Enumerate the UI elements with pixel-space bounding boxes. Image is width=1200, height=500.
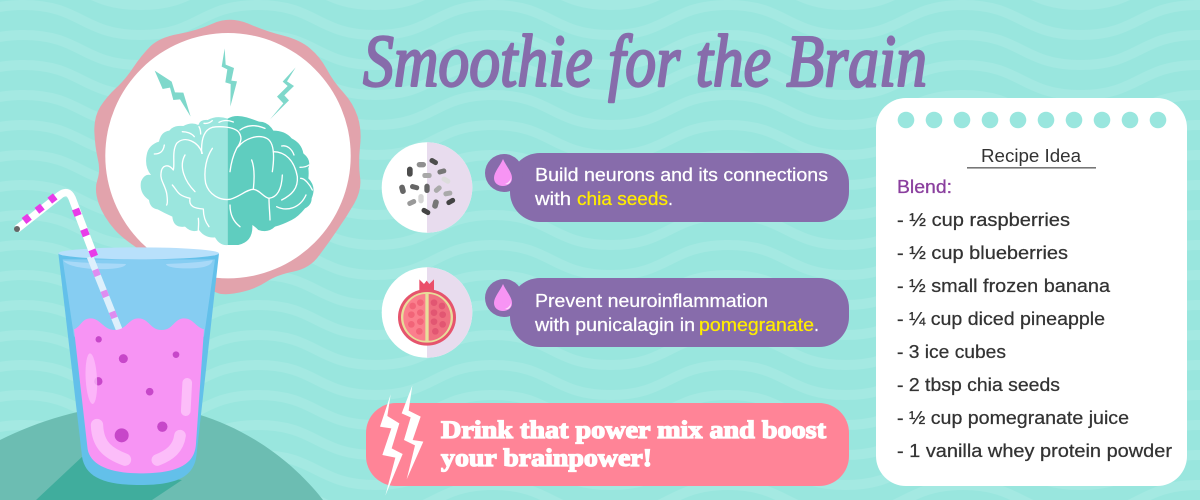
ingredient list: - ½ small frozen banana bbox=[897, 276, 1111, 296]
title: Smoothie for the Brain bbox=[363, 21, 927, 103]
banner text: Drink that power mix and boost bbox=[441, 417, 827, 444]
ingredient list: - ½ cup pomegranate juice bbox=[897, 408, 1129, 428]
table ellipse bbox=[0, 405, 323, 500]
white lightning icon bbox=[380, 385, 423, 496]
drop badge bbox=[485, 154, 523, 192]
recipe heading: Recipe Idea bbox=[981, 146, 1082, 166]
benefit text: Build neurons and its connections bbox=[535, 165, 828, 185]
notebook holes bbox=[898, 112, 1166, 128]
pomegranate benefit row bbox=[382, 267, 849, 358]
straw in glass bbox=[90, 257, 119, 330]
benefit text bbox=[534, 165, 828, 209]
benefit text: Prevent neuroinflammation bbox=[535, 291, 768, 311]
glass rim bbox=[58, 247, 219, 259]
benefit text: with bbox=[534, 189, 571, 209]
ingredient list: - ¼ cup diced pineapple bbox=[897, 309, 1105, 329]
chia seeds benefit row bbox=[382, 142, 849, 233]
ingredient list: - ½ cup blueberries bbox=[897, 243, 1068, 263]
ingredient list: - 2 tbsp chia seeds bbox=[897, 375, 1060, 395]
chia icon bbox=[382, 142, 472, 233]
white circle bbox=[105, 33, 351, 278]
purple pill bbox=[510, 278, 849, 347]
brain bbox=[141, 116, 314, 245]
ingredient list: - 1 vanilla whey protein powder bbox=[897, 441, 1172, 461]
drop badge bbox=[485, 279, 523, 317]
call to action banner bbox=[366, 385, 849, 496]
purple pill bbox=[510, 153, 849, 222]
recipe card bbox=[876, 98, 1187, 486]
benefit text: pomegranate bbox=[699, 315, 814, 335]
blend label: Blend: bbox=[897, 177, 952, 197]
benefit text bbox=[534, 291, 819, 335]
smoothie glass bbox=[58, 247, 219, 485]
glass body bbox=[58, 253, 219, 485]
ingredient list: - 3 ice cubes bbox=[897, 342, 1006, 362]
smoothie liquid bbox=[74, 318, 204, 473]
benefit text: . bbox=[814, 315, 819, 335]
brain badge bbox=[94, 20, 361, 294]
banner text: your brainpower! bbox=[441, 445, 652, 472]
lightning bolts bbox=[155, 48, 296, 119]
pomegranate icon bbox=[382, 267, 472, 358]
ingredient list bbox=[897, 210, 1172, 461]
benefit text: . bbox=[668, 189, 673, 209]
benefit text: chia seeds bbox=[577, 189, 668, 209]
straw above glass bbox=[14, 193, 96, 260]
benefit text: with punicalagin in bbox=[534, 315, 695, 335]
pink wavy badge bbox=[94, 20, 361, 294]
recipe heading bbox=[967, 146, 1096, 169]
liquid highlights bbox=[84, 353, 192, 460]
banner text bbox=[441, 417, 827, 472]
glass inner bbox=[63, 259, 215, 337]
smoothie bubbles bbox=[94, 336, 179, 442]
ingredient list: - ½ cup raspberries bbox=[897, 210, 1070, 230]
